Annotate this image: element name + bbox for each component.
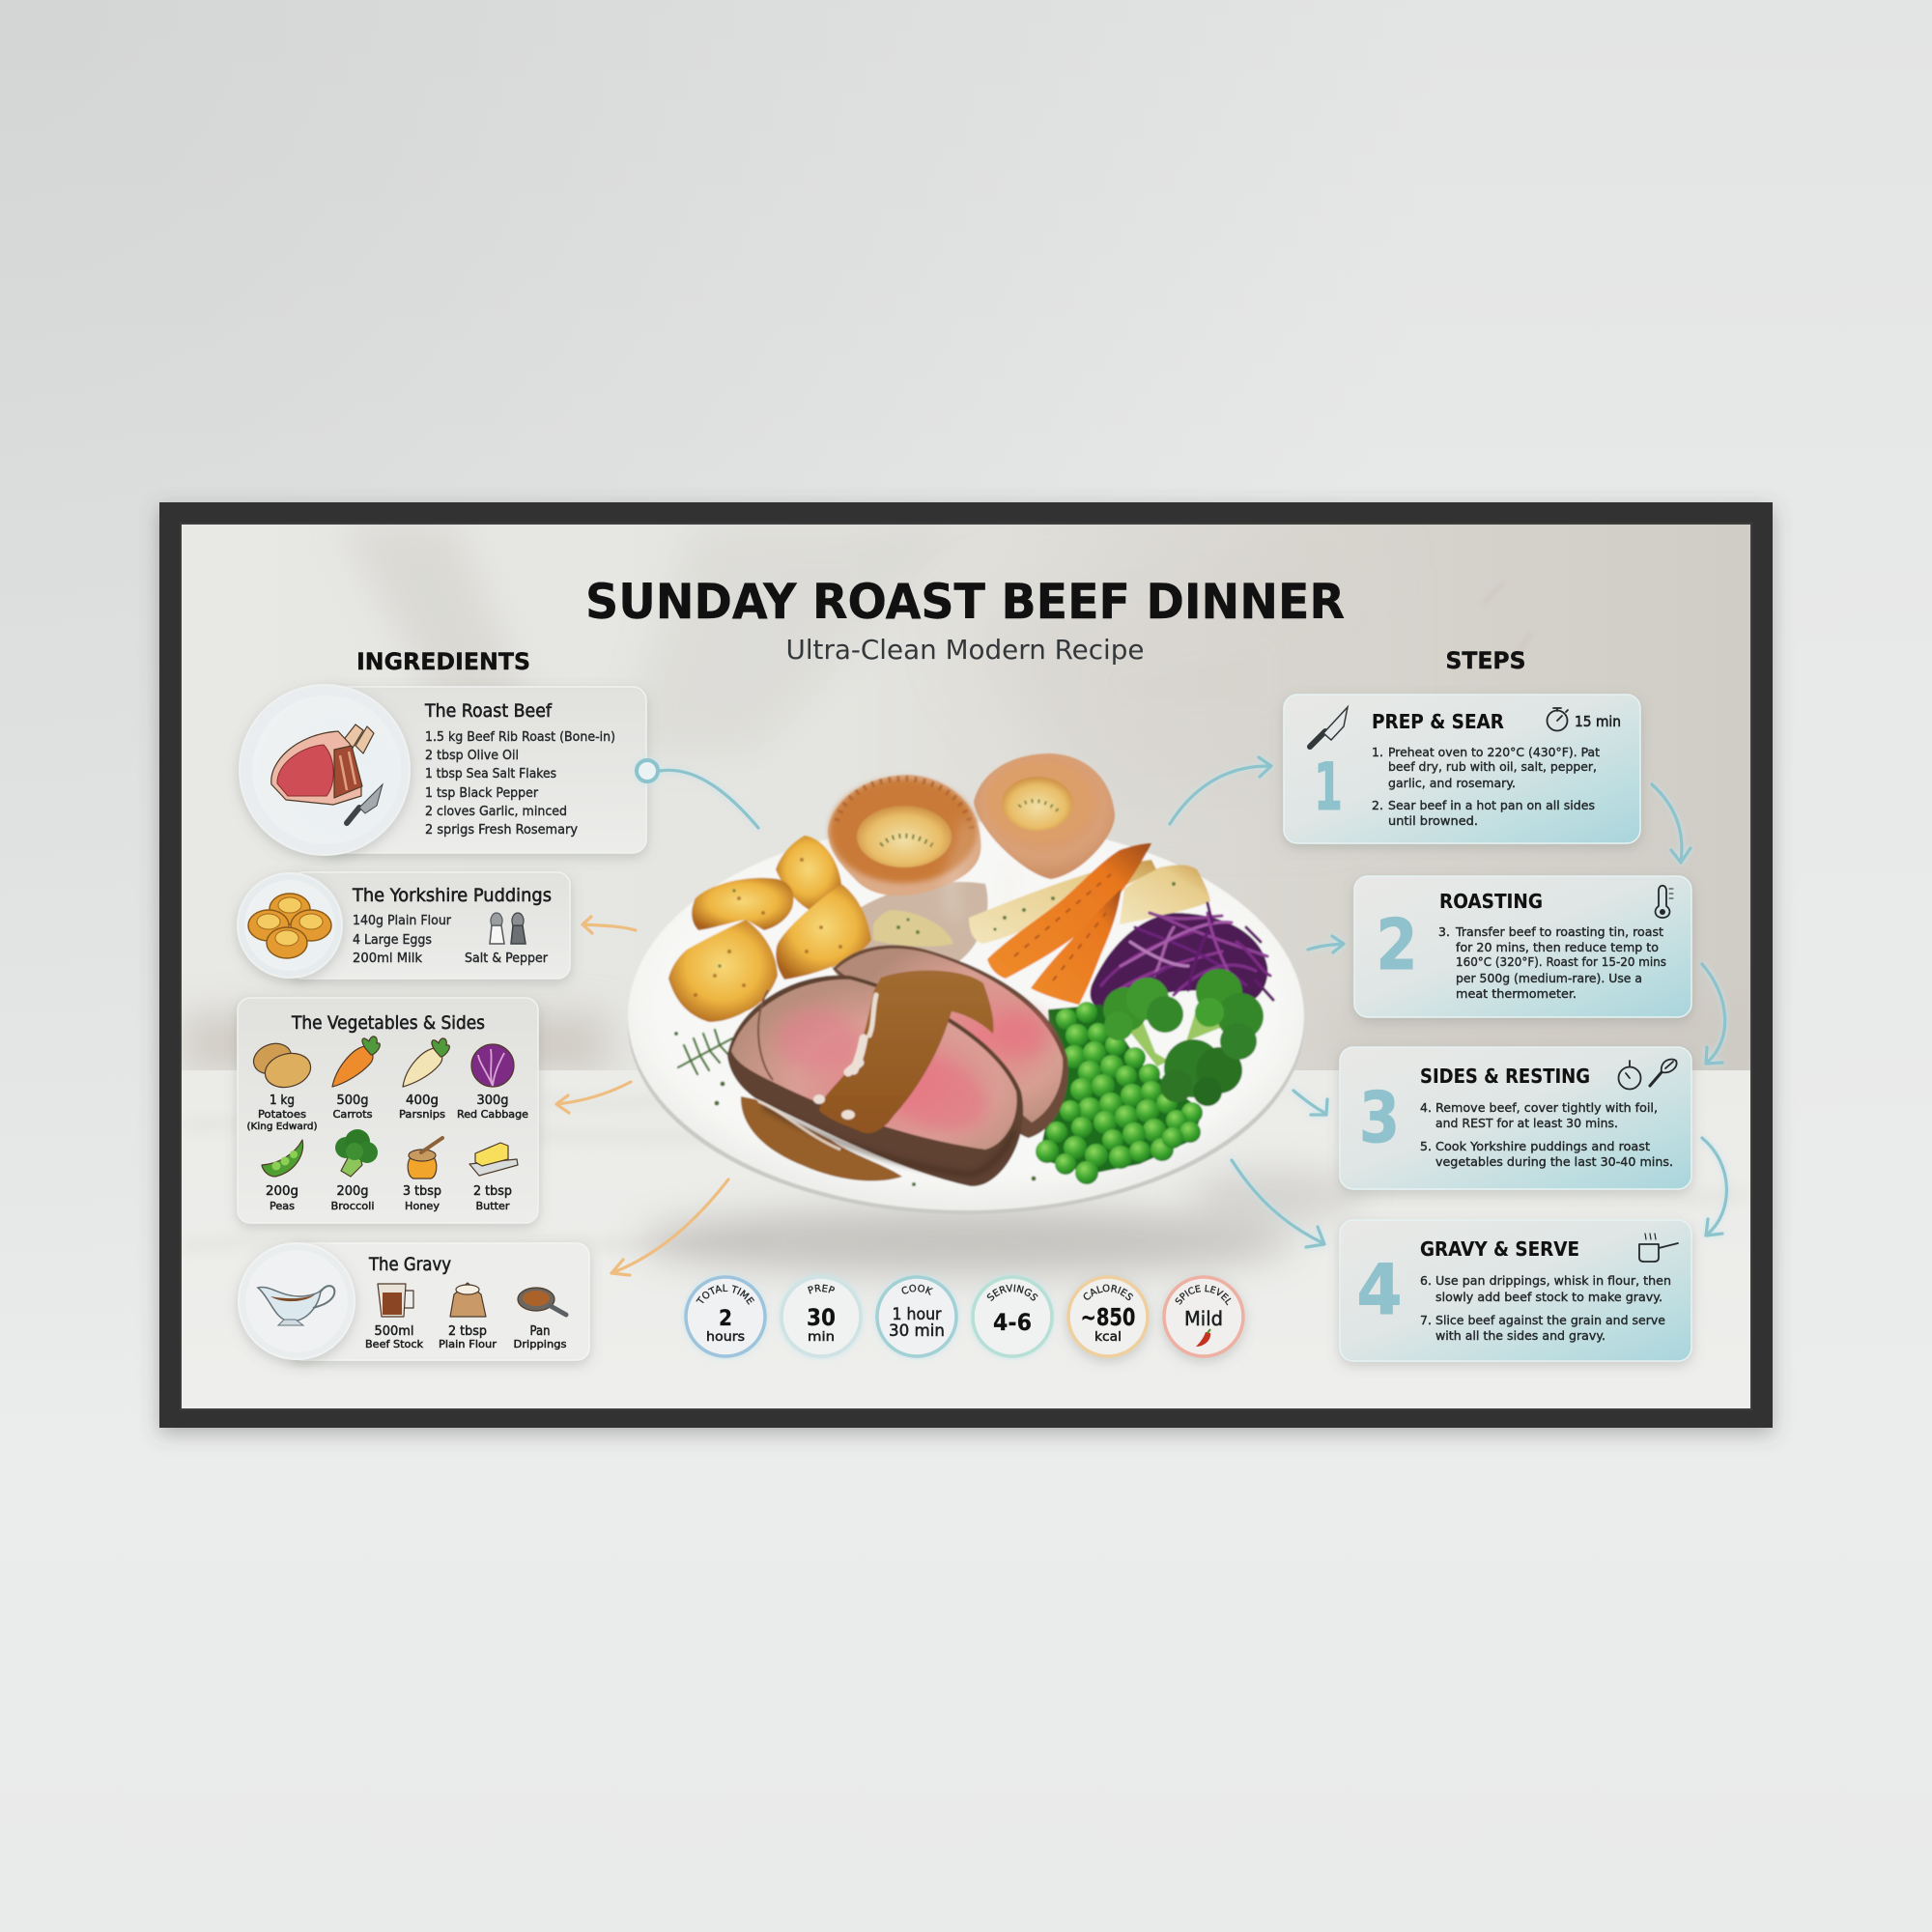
text: step 1 instructions: 2. (1372, 798, 1383, 812)
stat badge: cook (873, 1275, 960, 1360)
stat badge: cook: 1 hour (893, 1305, 941, 1324)
icon: potatoes (249, 1038, 315, 1093)
heading: vegetables: The Vegetables & Sides (291, 1012, 485, 1034)
heading: ingredients: INGREDIENTS (356, 648, 530, 675)
text: step 3 instructions: 5. (1420, 1139, 1432, 1153)
text: step 4 instructions: slowly add beef stock to make gravy. (1435, 1290, 1662, 1304)
label: potatoes: 1 kg (270, 1093, 295, 1108)
icon: red cabbage (471, 1044, 514, 1087)
icon: chef knife (1310, 707, 1348, 747)
label: peas: Peas (270, 1200, 295, 1212)
label: butter: 2 tbsp (473, 1183, 512, 1199)
label: honey: 3 tbsp (403, 1183, 441, 1199)
text: step 3 instructions: Remove beef, cover tightly with foil, (1435, 1100, 1658, 1115)
icon: saucepan (1639, 1234, 1678, 1262)
text: step 1 instructions: until browned. (1388, 813, 1478, 828)
red cabbage (1091, 903, 1273, 1009)
panel: step 1 prep and sear (1284, 695, 1640, 843)
text: yorkshire list: 140g Plain Flour (353, 913, 451, 928)
stat badge: cook: COOK (901, 1285, 933, 1295)
text: step 3 instructions: vegetables during the last 30-40 mins. (1435, 1154, 1673, 1169)
stat badge: cook: 30 min (889, 1321, 945, 1341)
text: step 2 instructions: Transfer beef to roasting tin, roast (1455, 924, 1663, 939)
stat badge: calories: CALORIES (1084, 1285, 1134, 1300)
number 4: 4 (1356, 1249, 1403, 1330)
heading: sides and resting: SIDES & RESTING (1420, 1065, 1590, 1088)
number 3: 3 (1359, 1077, 1400, 1158)
label: pan drippings (514, 1324, 567, 1350)
plate (628, 822, 1304, 1214)
gravy pool (741, 1096, 902, 1180)
number 2: 2 (1376, 904, 1418, 985)
text: step 2 instructions: meat thermometer. (1456, 986, 1577, 1001)
arrow: plate to yorkshire (582, 917, 636, 933)
gravy pour (758, 971, 993, 1150)
icon: timer and whisk (1619, 1059, 1677, 1090)
framed picture (159, 502, 1773, 1428)
icon: yorkshire puddings (248, 894, 331, 958)
stat badge: total time: TOTAL TIME (696, 1285, 755, 1305)
text: yorkshire list (352, 885, 552, 966)
label: plain flour: Plain Flour (439, 1338, 497, 1350)
text: step 2 instructions (1438, 924, 1666, 1001)
parsnips (969, 860, 1210, 944)
icon: carrot (332, 1037, 380, 1087)
text: step 4 instructions: with all the sides and gravy. (1435, 1328, 1605, 1343)
text: step 1 instructions (1372, 745, 1600, 828)
stat badge: servings: SERVINGS (987, 1284, 1037, 1301)
label: broccoli (330, 1183, 375, 1212)
label: red cabbage: 300g (477, 1093, 508, 1108)
rosemary (678, 1030, 732, 1074)
stat badge: servings (969, 1275, 1056, 1360)
label: potatoes: Potatoes (258, 1108, 306, 1121)
text: roast beef list: 1 tbsp Sea Salt Flakes (425, 766, 556, 781)
yorkshire puddings (828, 753, 1115, 895)
stat badge: calories (1063, 1275, 1153, 1366)
text: step 1 instructions: garlic, and rosemary. (1388, 776, 1516, 790)
stat badge: calories: kcal (1094, 1329, 1122, 1345)
icon: parsnip (403, 1038, 449, 1087)
steam and shadow behind the food (821, 882, 987, 980)
label: red cabbage: Red Cabbage (457, 1108, 528, 1121)
label: carrots (332, 1093, 373, 1121)
steam (951, 821, 1014, 942)
label: broccoli: Broccoli (330, 1200, 375, 1212)
arrow: plate to vegetables (556, 1082, 631, 1113)
panel: step 4 gravy and serve (1340, 1220, 1691, 1361)
panel: the yorkshire puddings (238, 872, 570, 979)
icon: thermometer (1656, 886, 1673, 918)
label: butter: Butter (475, 1200, 510, 1212)
icon: peas (262, 1140, 303, 1177)
icon: salt and pepper (490, 913, 526, 944)
text: yorkshire list: 200ml Milk (353, 951, 422, 966)
text: roast beef list: 1.5 kg Beef Rib Roast (Bone-in) (425, 729, 615, 745)
stat badge: servings: 4-6 (993, 1309, 1032, 1336)
text: step 1 instructions: 1. (1372, 745, 1383, 759)
label: peas (266, 1183, 298, 1212)
text: step 1 instructions: Sear beef in a hot pan on all sides (1388, 798, 1595, 812)
text: step 2 instructions: 3. (1438, 924, 1450, 939)
panel: the vegetables and sides (238, 998, 538, 1223)
label: pan drippings: Pan (529, 1324, 551, 1339)
subtitle: Ultra-Clean Modern Recipe (786, 634, 1144, 666)
label: carrots: Carrots (332, 1108, 373, 1121)
text: step 4 instructions (1420, 1273, 1671, 1343)
stat badge: prep: PREP (808, 1285, 835, 1294)
text: roast beef list: 1 tsp Black Pepper (425, 785, 538, 801)
herb flecks (674, 1032, 1036, 1186)
arrow: step 2 to step 3 (1702, 964, 1725, 1064)
arrow: plate to step 2 (1308, 936, 1344, 952)
icon: honey jar (408, 1138, 442, 1179)
text: step 4 instructions: 7. (1420, 1313, 1432, 1327)
heading: roasting: ROASTING (1439, 890, 1543, 913)
icon: beef stock jug (378, 1284, 413, 1317)
stat badge: prep: 30 (807, 1304, 836, 1331)
label: parsnips: 400g (406, 1093, 439, 1108)
stat badge: spice level (1159, 1275, 1249, 1366)
text: roast beef list: The Roast Beef (424, 700, 553, 722)
icon: butter (469, 1143, 518, 1176)
label: plain flour (439, 1323, 497, 1350)
arrow: plate to step 4 (1232, 1160, 1324, 1247)
label: parsnips: Parsnips (399, 1108, 445, 1121)
beef slices (727, 945, 1068, 1186)
label: potatoes: (King Edward) (247, 1122, 318, 1132)
text: roast beef list (424, 700, 615, 838)
broccoli (1103, 969, 1264, 1106)
arrow: step 1 to step 2 (1652, 784, 1690, 863)
arrow: plate to gravy (611, 1179, 728, 1275)
label: parsnips (399, 1093, 445, 1121)
label: honey: Honey (405, 1200, 440, 1212)
panel: step 3 sides and resting (1340, 1047, 1691, 1189)
text: step 1 instructions: Preheat oven to 220°C (430°F). Pat (1388, 745, 1600, 759)
text: step 2 instructions: per 500g (medium-rare). Use a (1456, 971, 1642, 985)
arrow: plate to step 1 (1170, 757, 1271, 824)
label: pan drippings: Drippings (514, 1338, 567, 1350)
text: step 1 instructions: beef dry, rub with oil, salt, pepper, (1388, 759, 1597, 774)
icon: gravy boat (258, 1286, 334, 1325)
heading: gravy and serve: GRAVY & SERVE (1420, 1237, 1579, 1261)
label: beef stock (365, 1323, 424, 1350)
text: step 3 instructions: 4. (1420, 1100, 1432, 1115)
label: broccoli: 200g (336, 1183, 369, 1199)
label: peas: 200g (266, 1183, 298, 1199)
label: red cabbage (457, 1093, 528, 1121)
text: step 4 instructions: Slice beef against the grain and serve (1435, 1313, 1665, 1327)
arrow: plate to step 3 (1293, 1091, 1327, 1115)
icon: timer 15 min (1548, 708, 1621, 730)
stat badge: calories: ~850 (1080, 1303, 1136, 1331)
stat badge: total time: 2 (719, 1307, 732, 1331)
heading: gravy: The Gravy (368, 1254, 451, 1275)
text: step 3 instructions (1420, 1100, 1673, 1169)
heading: steps: STEPS (1445, 647, 1526, 674)
stat badge: total time: hours (706, 1329, 745, 1345)
text: yorkshire list: 4 Large Eggs (353, 932, 432, 948)
label: potatoes (247, 1093, 318, 1132)
stat badge: prep: min (808, 1329, 835, 1345)
label: carrots: 500g (336, 1093, 369, 1108)
text: step 2 instructions: 160°C (320°F). Roast for 15-20 mins (1456, 954, 1666, 969)
text: roast beef list: 2 sprigs Fresh Rosemary (425, 822, 578, 838)
illustration: roast dinner plate (628, 753, 1304, 1214)
icon: frying pan (518, 1288, 566, 1315)
number 1: 1 (1314, 750, 1343, 826)
icon: rib roast and knife (271, 724, 383, 823)
text: roast beef list: 2 cloves Garlic, minced (425, 804, 567, 819)
stat badge: prep (778, 1274, 865, 1360)
text: yorkshire list: The Yorkshire Puddings (352, 885, 552, 906)
arrow: step 3 to step 4 (1702, 1138, 1726, 1236)
stat badge: spice level: Mild (1184, 1307, 1223, 1330)
panel: the gravy (239, 1243, 589, 1360)
label: honey (403, 1183, 441, 1212)
icon: flour sack (450, 1283, 486, 1317)
icon: timer 15 min: 15 min (1575, 713, 1621, 730)
panel: the roast beef (240, 685, 646, 855)
heading: prep and sear: PREP & SEAR (1372, 710, 1504, 733)
label: salt and pepper: Salt & Pepper (465, 951, 548, 966)
stat badge: spice level: SPICE LEVEL (1175, 1285, 1231, 1306)
arrow: plate to roast beef (637, 760, 758, 828)
text: roast beef list: 2 tbsp Olive Oil (425, 748, 519, 763)
text: step 4 instructions: Use pan drippings, whisk in flour, then (1435, 1273, 1671, 1288)
title: SUNDAY ROAST BEEF DINNER (585, 574, 1345, 630)
text: step 3 instructions: and REST for at least 30 mins. (1435, 1116, 1618, 1130)
label: butter (473, 1183, 512, 1212)
label: beef stock: 500ml (375, 1323, 413, 1339)
panel: step 2 roasting (1354, 876, 1691, 1017)
stat badge: total time (682, 1273, 769, 1360)
peas (1036, 1002, 1203, 1184)
label: plain flour: 2 tbsp (448, 1323, 487, 1339)
potatoes (668, 836, 953, 1022)
carrots (987, 843, 1151, 1005)
label: beef stock: Beef Stock (365, 1338, 424, 1350)
text: step 3 instructions: Cook Yorkshire puddings and roast (1435, 1139, 1650, 1153)
text: step 4 instructions: 6. (1420, 1273, 1432, 1288)
icon: broccoli (335, 1129, 378, 1177)
text: step 2 instructions: for 20 mins, then reduce temp to (1456, 940, 1659, 954)
